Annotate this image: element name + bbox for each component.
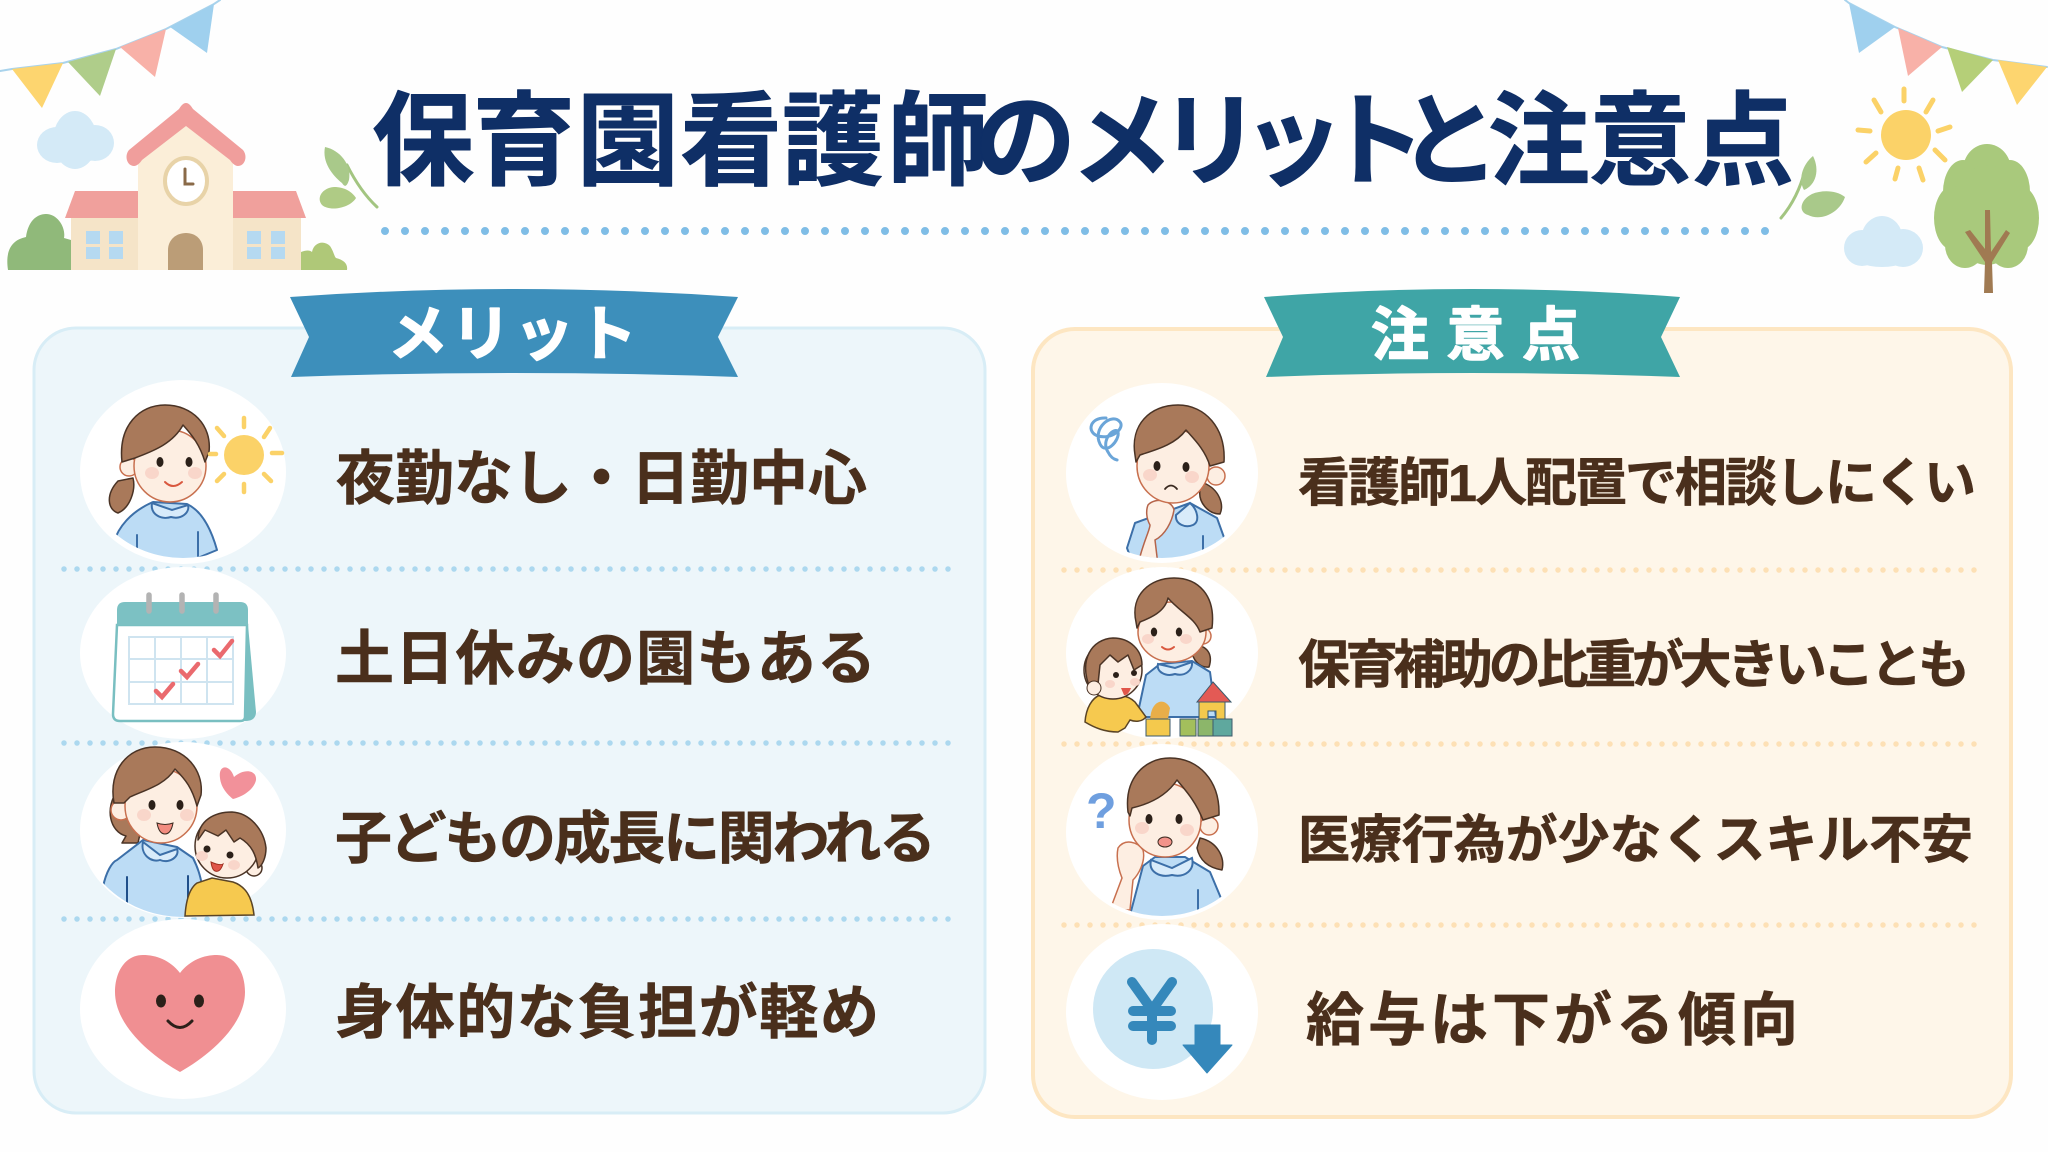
merits ribbon <box>290 289 738 377</box>
merits dividers <box>64 569 953 919</box>
icon: tree <box>1934 144 2039 293</box>
title: 保育園看護師のメリットと注意点 <box>372 85 1794 199</box>
merit 1 text: 夜勤なし・日勤中心 <box>336 446 867 512</box>
item: confused nurse: ? <box>1086 783 1117 839</box>
icon: leaf sprig right <box>1781 156 1845 218</box>
item: nurse with child <box>80 742 286 925</box>
caution 1 text: 看護師1人配置で相談しにくい <box>1298 455 1976 513</box>
door <box>168 233 203 270</box>
icon: cloud right <box>1844 216 1923 267</box>
panel: cautions <box>1033 289 2011 1117</box>
bush left <box>7 214 71 270</box>
icon: kindergarten building <box>7 103 347 270</box>
bush right <box>301 243 347 270</box>
icon: leaf sprig left <box>320 147 377 209</box>
icon: cloud left <box>37 111 114 169</box>
merit 2 text: 土日休みの園もある <box>335 626 876 692</box>
item: yen down <box>1066 924 1258 1100</box>
item: smiling heart <box>80 919 286 1099</box>
caution 2 text: 保育補助の比重が大きいことも <box>1298 637 1970 695</box>
bunting: top left <box>0 0 220 108</box>
title dotted rule <box>385 227 1785 235</box>
clock <box>165 158 207 204</box>
bunting: top right <box>1845 0 2047 105</box>
caution 4 text: 給与は下がる傾向 <box>1306 988 1798 1053</box>
cautions ribbon <box>1264 289 1680 377</box>
item: nurse with child and blocks <box>1066 567 1258 739</box>
cautions heading: 注意点 <box>1371 303 1580 368</box>
item: confused nurse <box>1066 744 1258 925</box>
panel: merits <box>34 289 985 1113</box>
merits heading: メリット <box>388 301 637 368</box>
wings <box>71 218 139 270</box>
tower <box>138 118 233 270</box>
main roof <box>127 103 245 166</box>
merit 3 text: 子どもの成長に関われる <box>335 807 936 871</box>
merit 4 text: 身体的な負担が軽め <box>335 980 879 1046</box>
cautions dividers <box>1064 570 1980 925</box>
icon: sun <box>1858 89 1950 180</box>
item: daytime work <box>80 380 286 575</box>
windows <box>86 231 285 259</box>
item: worried nurse <box>1066 383 1258 570</box>
side roofs <box>65 191 139 218</box>
item: calendar <box>80 567 286 739</box>
caution 3 text: 医療行為が少なくスキル不安 <box>1298 812 1973 870</box>
